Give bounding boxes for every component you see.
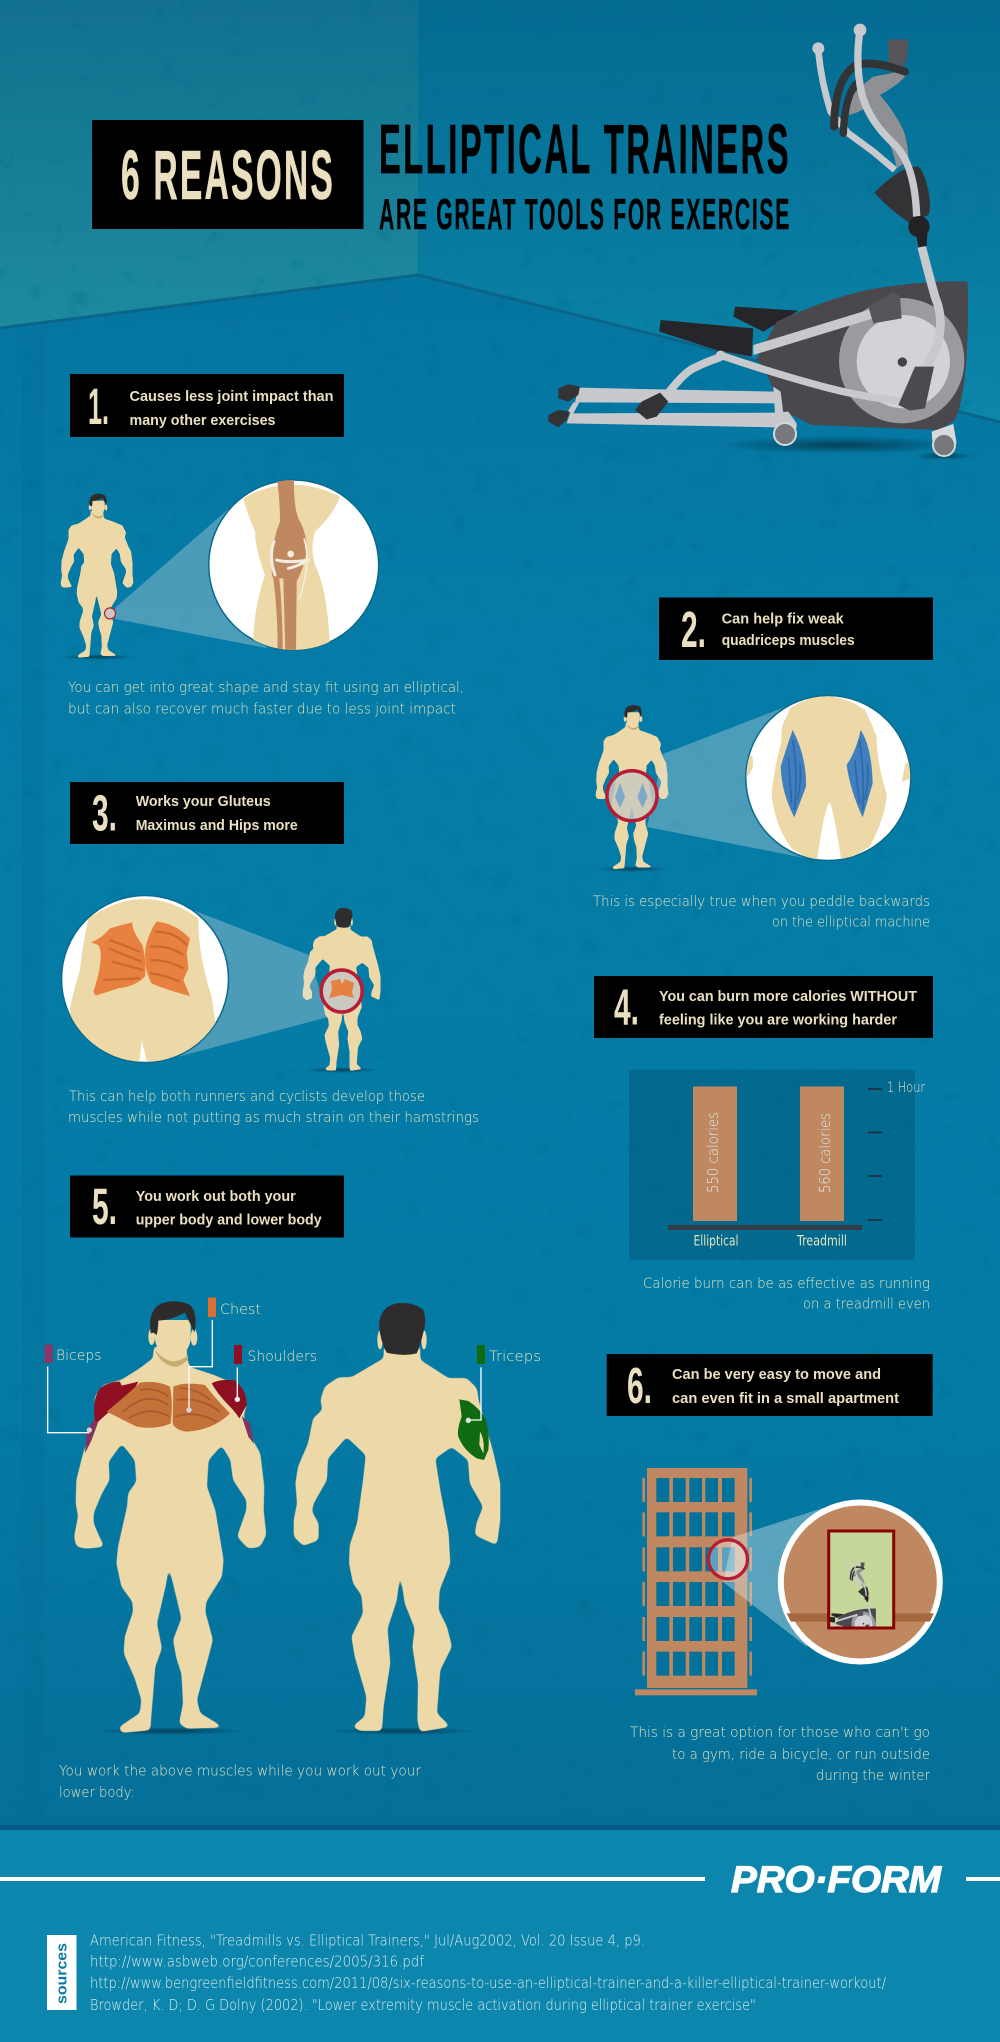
- panel: reason 6 heading: [607, 1354, 933, 1416]
- bar: treadmill: [800, 1086, 844, 1221]
- text: reason 4: on a treadmill even: [803, 1296, 930, 1312]
- text: reason 6: to a gym, ride a bicycle, or run outside: [672, 1747, 930, 1763]
- muscle: triceps: [458, 1399, 489, 1460]
- panel: reason 1 heading: [70, 374, 344, 437]
- title: [92, 110, 791, 239]
- panel: reason 5 heading: upper body and lower body: [136, 1212, 322, 1228]
- text: reason 6: This is a great option for those who can't go: [630, 1725, 930, 1741]
- logo with divider line: PRO·FORM: [731, 1859, 942, 1900]
- text: reason 5: lower body:: [59, 1785, 135, 1801]
- text: reason 3: muscles while not putting as much strain on their hamstrings: [68, 1110, 479, 1126]
- category label: treadmill: Treadmill: [796, 1234, 847, 1250]
- panel: reason 2 heading: Can help fix weak: [722, 612, 845, 628]
- footer band: [0, 1825, 1000, 2042]
- panel: reason 4 heading: You can burn more calories WITHOUT: [659, 989, 917, 1005]
- sources badge: sources: [54, 1943, 70, 2004]
- muscle: chest: [107, 1382, 230, 1432]
- text: reason 2: This is especially true when you peddle backwards: [593, 894, 930, 910]
- label: shoulders: [234, 1345, 317, 1365]
- label: triceps: Triceps: [489, 1349, 541, 1365]
- panel: reason 1 heading: Causes less joint impact than: [130, 388, 334, 405]
- text: reason 6: [630, 1725, 930, 1784]
- text: reason 4: Calorie burn can be as effective as running: [643, 1276, 930, 1292]
- illustration: gluteus callout: [62, 896, 380, 1073]
- bar: elliptical: [693, 1086, 737, 1221]
- text: reason 2: [593, 894, 930, 930]
- axis label: 1 Hour: [887, 1080, 925, 1096]
- source list: Browder, K. D; D. G Dolny (2002). "Lower extremity muscle activation during elliptical trainer exercise": [90, 1996, 756, 2014]
- panel: reason 6 heading: 6.: [627, 1357, 652, 1414]
- panel: reason 5 heading: You work out both your: [136, 1188, 296, 1205]
- illustration: quadriceps callout: [594, 696, 912, 872]
- text: reason 3: [68, 1089, 479, 1126]
- muscle: biceps: [85, 1416, 254, 1453]
- text: reason 3: This can help both runners and cyclists develop those: [69, 1089, 425, 1105]
- panel: reason 3 heading: Works your Gluteus: [136, 793, 271, 810]
- panel: reason 4 heading: [594, 976, 933, 1038]
- panel: reason 1 heading: 1.: [88, 378, 109, 435]
- leader lines: [48, 1320, 237, 1433]
- panel: reason 3 heading: 3.: [92, 784, 117, 842]
- panel: reason 2 heading: [659, 598, 933, 660]
- panel: reason 4 heading: 4.: [614, 978, 639, 1036]
- leader line: [468, 1367, 481, 1420]
- building: [635, 1468, 757, 1695]
- source list: [90, 1932, 886, 2014]
- label: biceps: [45, 1344, 102, 1364]
- panel: reason 6 heading: can even fit in a small apartment: [672, 1390, 899, 1407]
- illustration: back body with triceps: [294, 1303, 500, 1735]
- bar: elliptical: 550 calories: [704, 1112, 722, 1193]
- label: biceps: Biceps: [56, 1348, 102, 1364]
- bar: treadmill: 560 calories: [816, 1113, 834, 1193]
- text: reason 1: but can also recover much faster due to less joint impact: [68, 702, 456, 718]
- source list: http://www.bengreenfieldfitness.com/2011/08/six-reasons-to-use-an-elliptical-trainer-and-a-killer-elliptical-trainer-workout/: [90, 1974, 886, 1992]
- panel: reason 3 heading: Maximus and Hips more: [136, 817, 298, 834]
- panel: reason 6 heading: Can be very easy to move and: [672, 1366, 881, 1383]
- illustration: apartment building callout: [635, 1468, 940, 1695]
- panel: reason 5 heading: [70, 1176, 344, 1238]
- category label: elliptical: Elliptical: [694, 1234, 738, 1250]
- illustration: elliptical trainer: [548, 24, 974, 460]
- bar chart: calories per hour: [629, 1070, 925, 1260]
- badge: 6 reasons: [92, 120, 364, 229]
- source list: http://www.asbweb.org/conferences/2005/316.pdf: [90, 1953, 425, 1971]
- label: triceps: [477, 1345, 541, 1365]
- panel: reason 4 heading: feeling like you are working harder: [659, 1012, 897, 1028]
- text: reason 4: [643, 1276, 930, 1312]
- text: reason 2: on the elliptical machine: [772, 914, 930, 930]
- panel: reason 1 heading: many other exercises: [130, 412, 276, 429]
- panel: reason 3 heading: [70, 782, 344, 844]
- muscle: shoulders: [94, 1380, 247, 1422]
- source list: American Fitness, "Treadmills vs. Elliptical Trainers," Jul/Aug2002, Vol. 20 Issue 4, p9.: [90, 1932, 645, 1950]
- badge: 6 reasons: 6 REASONS: [121, 136, 335, 214]
- label: chest: [208, 1298, 261, 1318]
- sources badge: [47, 1935, 76, 2010]
- label: chest: Chest: [220, 1302, 261, 1318]
- panel: reason 2 heading: 2.: [681, 601, 706, 658]
- sources: [47, 1932, 886, 2014]
- logo with divider line: [0, 1859, 1000, 1900]
- panel: reason 2 heading: quadriceps muscles: [722, 633, 855, 649]
- panel: reason 5 heading: 5.: [92, 1178, 117, 1235]
- illustration: knee callout: [59, 477, 379, 660]
- text: reason 1: You can get into great shape and stay fit using an elliptical,: [68, 680, 464, 696]
- illustration: front body with muscles: [48, 1301, 266, 1735]
- text: reason 6: during the winter: [816, 1768, 930, 1784]
- text: reason 5: You work the above muscles while you work out your: [59, 1764, 421, 1780]
- text: reason 1: [68, 680, 464, 718]
- text: reason 5: [59, 1764, 421, 1801]
- label: shoulders: Shoulders: [248, 1349, 317, 1365]
